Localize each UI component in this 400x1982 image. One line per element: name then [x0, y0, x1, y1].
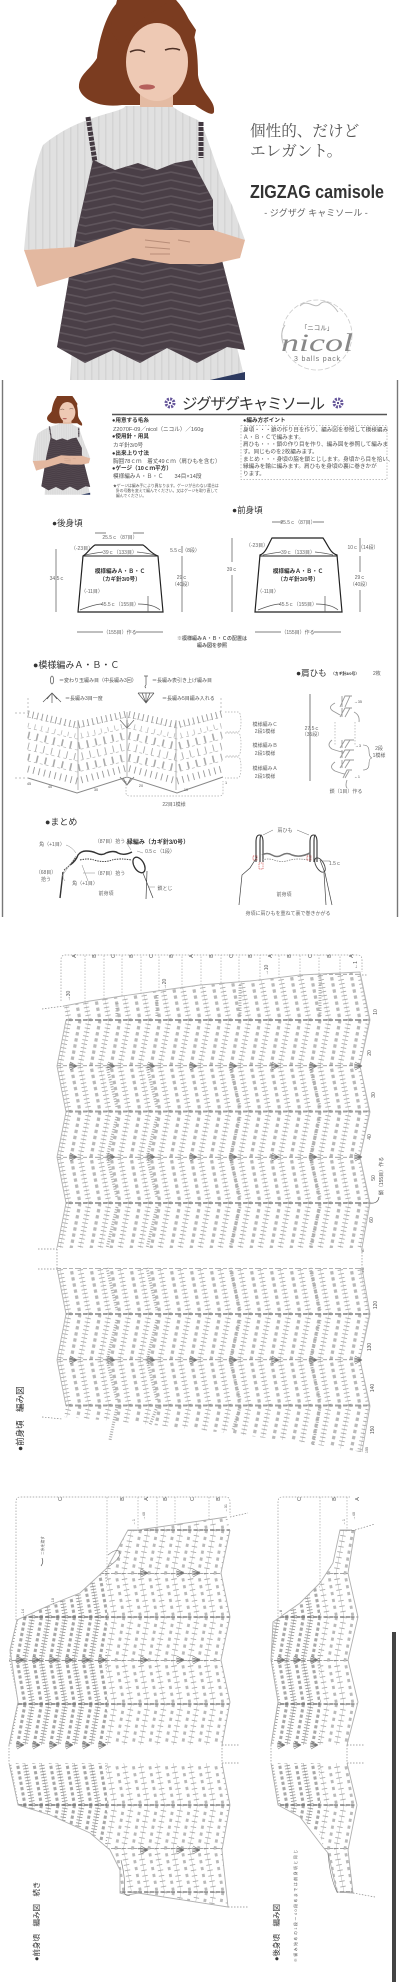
logo: nicol yarn wreath: 3 balls pack [294, 356, 340, 363]
numbers and repeat bracket under swatch: 30 [94, 788, 98, 792]
labels: section letters along top of main chart: B [287, 954, 293, 958]
labels: section letters along top of main chart: A [268, 954, 274, 958]
chart: shoulder strap: 2段 [375, 745, 383, 752]
labels: section letters along top of main chart [72, 954, 355, 958]
text block: materials [112, 416, 221, 480]
labels: front body continued: C [58, 1497, 64, 1501]
note: gauge: 針の号数を変えて編んでください。又はゲージを取り直して [116, 488, 218, 493]
labels: front body continued: →10 [51, 1598, 55, 1606]
legend: stitch symbols [43, 676, 215, 703]
chart: front body stitch diagram, top half [57, 972, 370, 1248]
heading: shoulder strap [296, 668, 381, 678]
brackets: pattern labels A B C: 模様編みＡ [252, 765, 278, 772]
text block: materials: ●ゲージ（10ｃｍ平方） [112, 464, 172, 472]
schematic: back body [50, 518, 200, 636]
logo: nicol yarn wreath [281, 300, 353, 370]
note: back body chart: ※編み始めの1段～40段めまでは前身頃と同じ [293, 1850, 298, 1962]
logo: nicol yarn wreath: nicol [281, 330, 353, 357]
labels: back body [279, 1497, 361, 1616]
labels: section letters along top of main chart: A [349, 954, 355, 958]
schematic: back body: ●後身頃 [52, 518, 83, 528]
panel: hero photo of woman in zigzag camisole [24, 0, 245, 380]
text block: knitting points in dotted box: 縁編みを輪に編みます。肩ひもを身頃の裏に巻きかが [243, 462, 377, 470]
panel frame: side rules of pattern sheet [2, 380, 398, 917]
diagram: finishing neck edging: 角（+1目） [39, 841, 65, 848]
legend: stitch symbols: ＝変わり玉編み目（中長編み3回） [59, 677, 137, 684]
diagram: finishing neck edging: 前身頃 [98, 890, 114, 897]
labels: row and stitch numbers on main chart: 20 [367, 1050, 373, 1056]
panel: hero tagline [250, 122, 359, 160]
schematic: back body: 5.5ｃ（8段） [170, 547, 200, 554]
labels: back body: A [355, 1497, 361, 1501]
schematic: back body: （-23目） [71, 546, 93, 552]
chart: front body continued, lower [9, 1763, 230, 1907]
note: pattern placement: ※模様編みＡ・Ｂ・Ｃの配置は [177, 635, 247, 642]
diagram: finishing neck edging: （87目）拾う [95, 838, 125, 845]
schematic: back body: （-11目） [81, 589, 103, 595]
labels: row and stitch numbers on main chart: 鎖（155目）作る [378, 1157, 385, 1195]
labels: section letters along top of main chart: B [169, 954, 175, 958]
brackets and guides, front body continued [9, 1497, 248, 1907]
labels: section letters along top of main chart: A [72, 954, 78, 958]
labels: row and stitch numbers on main chart: 130 [367, 1343, 373, 1351]
heading: shoulder strap: ●肩ひも [296, 668, 327, 678]
labels: row and stitch numbers on main chart: →10 [264, 965, 270, 975]
labels: back body: →8 [279, 1610, 283, 1616]
chart: pattern repeat swatch [15, 698, 223, 793]
numbers and repeat bracket under swatch: 20 [139, 784, 143, 788]
numbers and repeat bracket under swatch: 1 [225, 781, 227, 785]
chart: shoulder strap [302, 694, 385, 795]
logo: nicol yarn wreath: 「ニコル」 [301, 324, 333, 332]
schematic: front body: 模様編みＡ・Ｂ・Ｃ [273, 567, 323, 575]
text block: materials: 胸囲78ｃｍ 着丈49ｃｍ（肩ひもを含む） [113, 457, 221, 465]
labels: row and stitch numbers on main chart: 155 [365, 1447, 369, 1453]
chart: front body stitch diagram, bottom half [57, 1268, 370, 1452]
labels: front body continued: B [216, 1497, 222, 1501]
schematic: front body: （155目）作る [281, 629, 315, 636]
labels: row and stitch numbers on main chart [66, 961, 385, 1453]
schematic: back body: 45.5ｃ（155目） [101, 602, 139, 608]
labels: section letters along top of main chart: C [111, 954, 117, 958]
numbers and repeat bracket under swatch: 22目1模様 [162, 801, 186, 808]
schematic: back body: 29ｃ [177, 575, 187, 581]
heading: shoulder strap: 2枚 [373, 670, 381, 677]
text block: knitting points in dotted box: 身頃・・・鎖の作り目を作り、編み図を参照して模様編み [243, 426, 388, 434]
chart: shoulder strap: →3 [355, 744, 361, 748]
title: ジグザグキャミソール with flowers: ジグザグキャミソール [182, 395, 325, 413]
edge line: neck and armhole, lower [9, 1763, 230, 1907]
labels: section letters along top of main chart: B [248, 954, 254, 958]
brackets: pattern labels A B C: 2段1模様 [255, 728, 275, 735]
diagram: finishing neck edging [36, 838, 189, 899]
labels: section letters along top of main chart: B [129, 954, 135, 958]
brackets: pattern labels A B C: 2段1模様 [255, 773, 275, 780]
chart: back body, lower [271, 1763, 357, 1893]
photo: small product thumbnail [33, 396, 90, 495]
edge line: back, upper [271, 1530, 358, 1745]
diagram: strap attachment: 1.5ｃ [329, 861, 341, 867]
brackets: pattern labels A B C: 模様編みＢ [252, 742, 278, 749]
chart: shoulder strap: ←1 [354, 775, 360, 779]
note: pattern placement: 編み図を参照 [197, 642, 227, 649]
edge line: bottom half [57, 1268, 370, 1452]
edge line: neck and armhole, upper [9, 1517, 230, 1745]
heading: finishing: ●まとめ [45, 817, 77, 827]
labels: section letters along top of main chart: C [229, 954, 235, 958]
diagram: finishing neck edging: 縁編み（カギ針3/0号） [127, 838, 189, 846]
labels: section letters along top of main chart: C [308, 954, 314, 958]
text block: materials: ●用意する毛糸 [112, 416, 149, 424]
diagram: finishing neck edging: 角（+1目） [72, 880, 98, 887]
schematic: front body: （カギ針3/0号） [277, 575, 319, 583]
numbers and repeat bracket under swatch: 45 [27, 782, 31, 786]
labels: section letters along top of main chart: B [327, 954, 333, 958]
brackets: pattern labels A B C [225, 712, 278, 780]
labels: row and stitch numbers on main chart: 60 [369, 1217, 375, 1223]
diagram: strap attachment: 前身頃 [276, 891, 292, 898]
numbers and repeat bracket under swatch: 10 [184, 788, 188, 792]
schematic: front body: ●前身頃 [232, 505, 263, 515]
text block: knitting points in dotted box: す。同じものを2枚編みます。 [243, 448, 318, 456]
numbers and repeat bracket under swatch [27, 781, 227, 808]
schematic: back body: （40段） [172, 581, 192, 588]
schematic: front body: 39ｃ（133目） [281, 550, 315, 556]
labels: front body continued: C [190, 1497, 196, 1501]
diagram: finishing neck edging: （87目）拾う [95, 870, 125, 877]
heading: back body chart: ●後身頃 編み図 [271, 1904, 281, 1961]
labels: back body: B [332, 1497, 338, 1501]
labels: front body continued: →40 [142, 1512, 146, 1520]
text block: knitting points in dotted box: Ａ・Ｂ・Ｃで編みます。 [243, 433, 304, 441]
labels: front body continued: ←1 [132, 1519, 136, 1525]
labels: row and stitch numbers on main chart: 40 [367, 1134, 373, 1140]
labels: front body continued: B [163, 1497, 169, 1501]
schematic: front body: （-11目） [257, 589, 279, 595]
labels: row and stitch numbers on main chart: 111 [361, 1267, 365, 1273]
labels: section letters along top of main chart: C [149, 954, 155, 958]
schematic: front body: （-23目） [246, 543, 268, 549]
diagram: finishing neck edging: 0.5ｃ（1段） [145, 848, 175, 855]
diagram: strap attachment [239, 828, 341, 917]
numbers and repeat bracket under swatch: 40 [48, 785, 52, 789]
diagram: finishing neck edging: 拾う [41, 876, 51, 883]
labels: front body continued: ←31 [224, 1504, 228, 1512]
heading: shoulder strap: （カギ針3/0号） [331, 671, 359, 676]
schematic: back body: 39ｃ（133目） [103, 550, 137, 556]
diagram: strap attachment: 身頃に肩ひもを重ねて裏で巻きかがる [245, 910, 331, 917]
text block: materials: Z2070F-09／nicol（ニコル）／160g [113, 426, 203, 433]
chart: shoulder strap: 1模様 [373, 752, 385, 759]
diagram: finishing neck edging: （68目） [36, 870, 56, 876]
text block: materials: カギ針3/0号 [113, 441, 144, 449]
labels: row and stitch numbers on main chart: ←1 [353, 961, 359, 969]
chart: front body continued, upper [9, 1517, 230, 1745]
edge line: back, lower [271, 1763, 357, 1893]
note: pattern placement [177, 635, 247, 649]
schematic: front body: 25.5ｃ（87目） [280, 520, 316, 526]
brackets: pattern labels A B C: 模様編みＣ [252, 721, 278, 728]
labels: row and stitch numbers on main chart: 67 [361, 1248, 365, 1252]
chart: shoulder strap: 27.5ｃ [305, 726, 319, 732]
text block: knitting points in dotted box: ●編み方ポイント [243, 416, 286, 424]
text block: knitting points in dotted box: 肩ひも・・・鎖の作り目を作り、編み図を参照して編みま [243, 440, 388, 448]
labels: row and stitch numbers on main chart: 30 [371, 1092, 377, 1098]
legend: stitch symbols: ＝長編み表引き上げ編み目 [152, 677, 212, 684]
note: gauge [113, 483, 219, 498]
labels: row and stitch numbers on main chart: 120 [373, 1301, 379, 1309]
legend: stitch symbols: ＝長編み3目一度 [65, 695, 103, 702]
note: gauge: ★ゲージは編み手により異なります。ゲージが合わない場合は [113, 483, 219, 488]
labels: front body continued: B [120, 1497, 126, 1501]
brackets and guides, back body [271, 1497, 375, 1897]
note: gauge: 編んでください。 [116, 493, 146, 498]
text block: knitting points in dotted box [241, 416, 393, 480]
schematic: front body: 10ｃ（14段） [347, 544, 379, 551]
labels: front body continued: A [144, 1497, 150, 1501]
schematic: back body: 34.5ｃ [50, 576, 64, 582]
heading: pattern A B C: ●模様編みＡ・Ｂ・Ｃ [33, 659, 119, 670]
schematic: front body: 45.5ｃ（155目） [279, 602, 317, 608]
fans and dense columns [69, 975, 362, 1445]
labels: back body: C [297, 1497, 303, 1501]
chart: shoulder strap: （35段） [302, 731, 322, 738]
chart: shoulder strap: 鎖（1目）作る [330, 788, 362, 795]
fans, front body continued [16, 1569, 200, 1854]
heading: front body chart continued: ●前身頃 編み図 続き [31, 1881, 41, 1961]
fans, back body [277, 1656, 318, 1749]
chart: back body, upper [271, 1530, 358, 1745]
labels: section letters along top of main chart: A [189, 954, 195, 958]
edge line: top half [57, 972, 370, 1248]
chart: shoulder strap: →35 [354, 700, 362, 704]
text block: knitting points in dotted box: まとめ・・・身頃の脇を鎖とじします。身頃から目を拾い、 [243, 455, 393, 463]
text block: materials: ●使用針・用具 [112, 432, 149, 440]
labels: row and stitch numbers on main chart: →20 [162, 979, 168, 989]
heading: front body chart: ●前身頃 編み図 [15, 1386, 25, 1451]
labels: row and stitch numbers on main chart: 140 [370, 1384, 376, 1392]
labels: back body: →40 [352, 1512, 356, 1520]
brackets: pattern labels A B C: 2段1模様 [255, 750, 275, 757]
schematic: front body: （40段） [350, 581, 370, 588]
labels: back body: ←1 [342, 1519, 346, 1525]
labels: row and stitch numbers on main chart: 150 [370, 1426, 376, 1434]
schematic: back body: （カギ針3/0号） [99, 575, 141, 583]
heading: ZIGZAG camisole: ZIGZAG camisole [250, 182, 384, 202]
schematic: back body: 25.5ｃ（87目） [102, 535, 138, 541]
labels: front body continued [21, 1497, 228, 1617]
text block: knitting points in dotted box: ります。 [243, 470, 265, 478]
bar: right edge scrollbar [392, 1632, 396, 1982]
schematic: front body [227, 505, 379, 636]
labels: section letters along top of main chart: B [209, 954, 215, 958]
diagram: strap attachment: 肩ひも [277, 828, 293, 834]
labels: section letters along top of main chart: B [92, 954, 98, 958]
labels: row and stitch numbers on main chart: →30 [66, 991, 72, 1001]
text block: materials: 模様編みＡ・Ｂ・Ｃ 34目×14段 [113, 472, 202, 480]
labels: row and stitch numbers on main chart: 10 [373, 1009, 379, 1015]
labels: front body continued: ＝糸を渡す [40, 1536, 45, 1555]
panel: hero tagline: 個性的、だけど [250, 122, 359, 140]
legend: stitch symbols: ＝長編み5目編み入れる [162, 695, 215, 702]
schematic: back body: 模様編みＡ・Ｂ・Ｃ [95, 567, 145, 575]
labels: front body continued: →14 [21, 1609, 25, 1617]
panel: hero tagline: エレガント。 [250, 143, 342, 160]
text block: materials: ●出来上り寸法 [112, 449, 149, 457]
subtitle: Japanese name: - ジグザグ キャミソール - [264, 207, 368, 218]
schematic: front body: 29ｃ [355, 575, 365, 581]
schematic: back body: （155目）作る [103, 629, 137, 636]
row brackets and dotted guides, main chart [38, 955, 368, 1419]
diagram: finishing neck edging: 鎖とじ [157, 885, 173, 892]
schematic: front body: 39ｃ [227, 567, 237, 573]
rule under title [112, 414, 387, 416]
labels: row and stitch numbers on main chart: 50 [371, 1175, 377, 1181]
